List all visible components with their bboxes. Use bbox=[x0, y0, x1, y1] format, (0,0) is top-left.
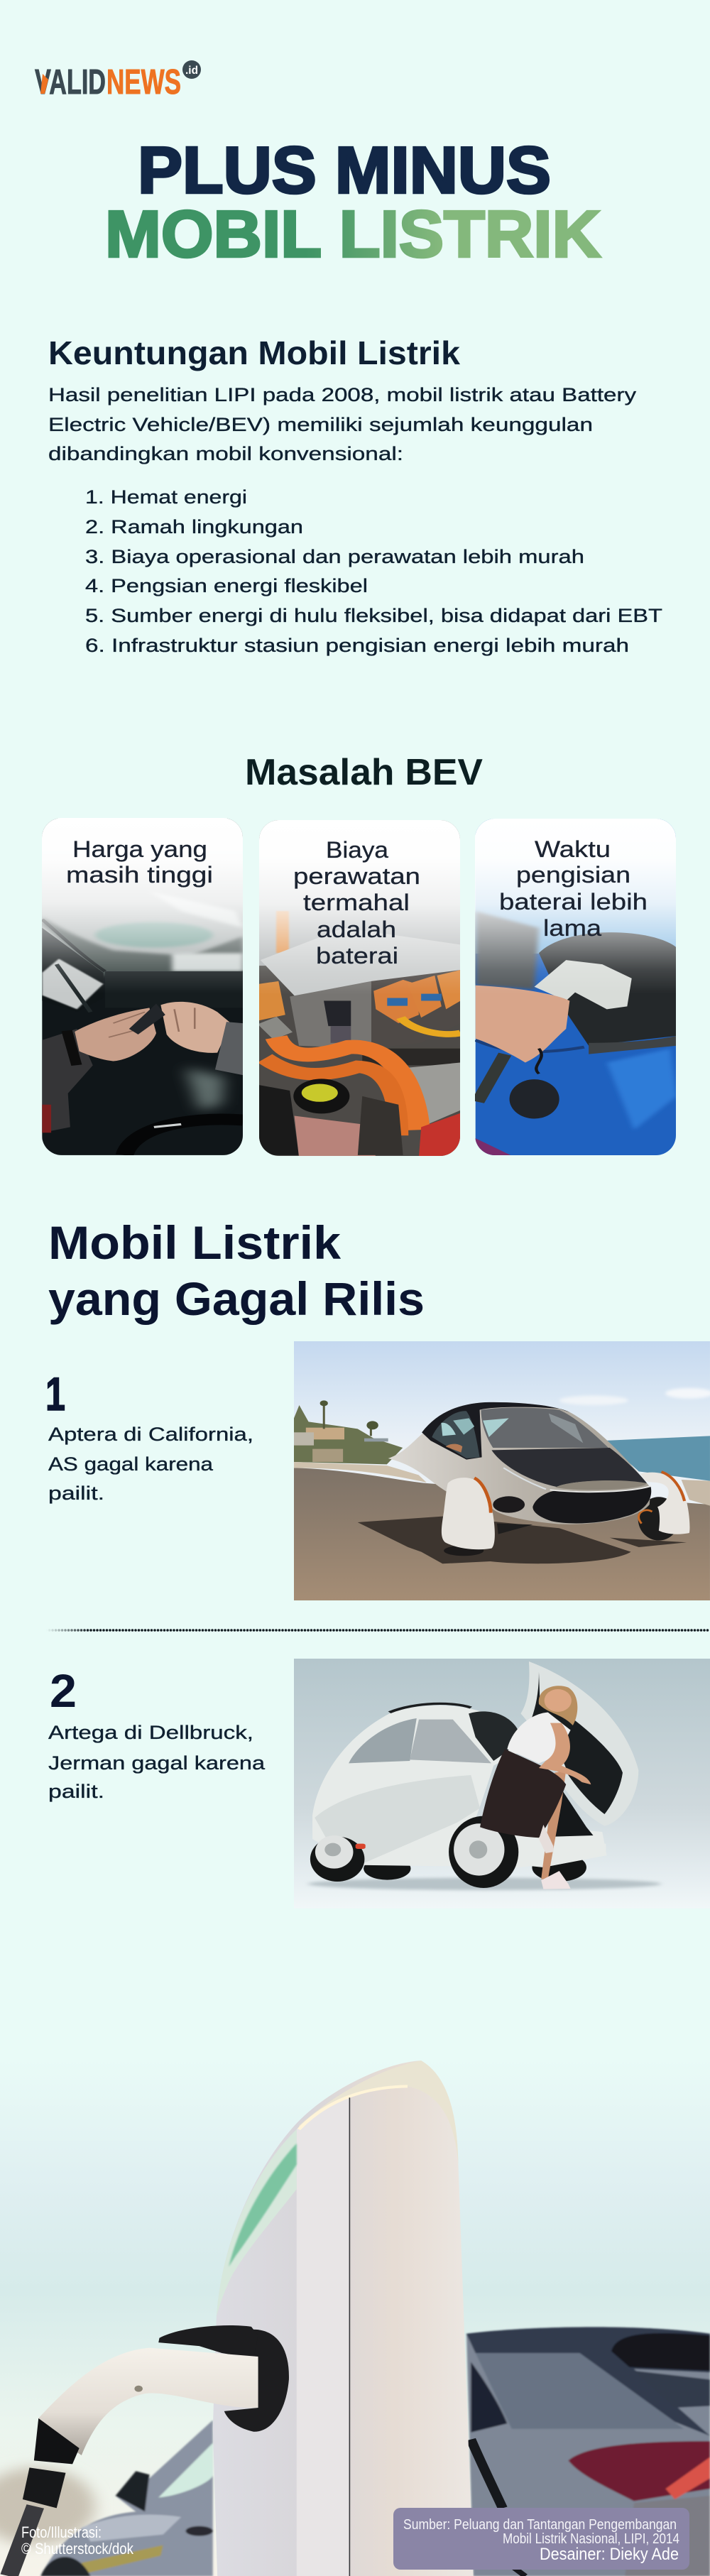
logo: Validnews.id bbox=[35, 60, 201, 102]
right car bbox=[466, 2327, 710, 2576]
intro paragraph bbox=[48, 384, 637, 464]
card label: lama bbox=[543, 915, 601, 941]
list of advantages: 6. Infrastruktur stasiun pengisian energi lebih murah bbox=[85, 635, 629, 656]
source box: Desainer: Dieky Ade bbox=[540, 2545, 679, 2564]
item 2 description: pailit. bbox=[48, 1781, 104, 1802]
card label: adalah bbox=[317, 917, 396, 942]
source box: Sumber: Peluang dan Tantangan Pengembangan bbox=[403, 2517, 677, 2533]
item 1 description bbox=[48, 1424, 253, 1504]
card label: termahal bbox=[303, 890, 410, 915]
heading: Mobil Listrik yang Gagal Rilis bbox=[48, 1216, 425, 1325]
card: waktu pengisian bbox=[475, 819, 677, 1156]
card label: perawatan bbox=[293, 863, 420, 889]
holster bbox=[224, 2330, 289, 2432]
title: PLUS MINUS bbox=[138, 133, 551, 207]
heading: Keuntungan Mobil Listrik: Keuntungan Mobil Listrik bbox=[48, 334, 460, 371]
photo: Artega car and model bbox=[294, 1659, 710, 1909]
item 2 description: Artega di Dellbruck, bbox=[48, 1722, 253, 1743]
item 1 description: AS gagal karena bbox=[48, 1453, 214, 1475]
source box bbox=[393, 2508, 689, 2570]
post bbox=[213, 2061, 474, 2576]
card label: Harga yang bbox=[72, 836, 207, 862]
list of advantages: 2. Ramah lingkungan bbox=[85, 516, 303, 537]
heading: Mobil Listrik yang Gagal Rilis: Mobil Listrik bbox=[48, 1216, 341, 1269]
plug bbox=[38, 2348, 258, 2455]
card label bbox=[499, 836, 648, 941]
card label: masih tinggi bbox=[66, 862, 213, 888]
logo: Validnews.id: NEWS bbox=[106, 63, 181, 102]
heading: Mobil Listrik yang Gagal Rilis: yang Gagal Rilis bbox=[48, 1272, 425, 1325]
intro paragraph: Hasil penelitian LIPI pada 2008, mobil listrik atau Battery bbox=[48, 384, 637, 405]
photo credit bbox=[21, 2523, 134, 2558]
list of advantages: 5. Sumber energi di hulu fleksibel, bisa didapat dari EBT bbox=[85, 605, 662, 626]
card label bbox=[66, 836, 213, 888]
left car bbox=[40, 2420, 213, 2576]
item 1 description: Aptera di California, bbox=[48, 1424, 253, 1445]
photo credit: © Shutterstock/dok bbox=[21, 2540, 134, 2558]
card: harga bbox=[42, 818, 243, 1155]
source box: Mobil Listrik Nasional, LIPI, 2014 bbox=[503, 2531, 679, 2547]
logo: Validnews.id: .id bbox=[185, 65, 198, 77]
intro paragraph: Electric Vehicle/BEV) memiliki sejumlah keunggulan bbox=[48, 414, 593, 435]
card label bbox=[293, 837, 420, 968]
item 1 description: pailit. bbox=[48, 1483, 104, 1504]
blurred trees bbox=[0, 2467, 95, 2545]
item 1 number: 1 bbox=[45, 1368, 65, 1420]
card: biaya perawatan bbox=[259, 820, 461, 1157]
logo: Validnews.id: VALID bbox=[35, 63, 106, 102]
list of advantages: 3. Biaya operasional dan perawatan lebih murah bbox=[85, 546, 584, 567]
heading: Masalah BEV: Masalah BEV bbox=[245, 752, 483, 793]
title: MOBIL LISTRIK bbox=[105, 197, 601, 271]
item 2 number: 2 bbox=[50, 1664, 77, 1717]
card label: Waktu bbox=[535, 836, 611, 862]
list of advantages: 1. Hemat energi bbox=[85, 486, 247, 508]
photo: Aptera car bbox=[294, 1341, 710, 1600]
intro paragraph: dibandingkan mobil konvensional: bbox=[48, 443, 403, 464]
item 2 description: Jerman gagal karena bbox=[48, 1752, 266, 1774]
card label: Biaya bbox=[326, 837, 388, 863]
list of advantages: 4. Pengsian energi fleskibel bbox=[85, 575, 368, 596]
photo: charging station bbox=[0, 2024, 710, 2576]
card label: baterai bbox=[316, 943, 398, 968]
card label: baterai lebih bbox=[499, 889, 648, 915]
title bbox=[105, 133, 601, 271]
photo credit: Foto/Illustrasi: bbox=[21, 2523, 102, 2541]
divider: dotted line bbox=[46, 1629, 710, 1632]
card label: pengisian bbox=[516, 862, 630, 888]
item 2 description bbox=[48, 1722, 266, 1802]
list of advantages bbox=[85, 486, 662, 656]
